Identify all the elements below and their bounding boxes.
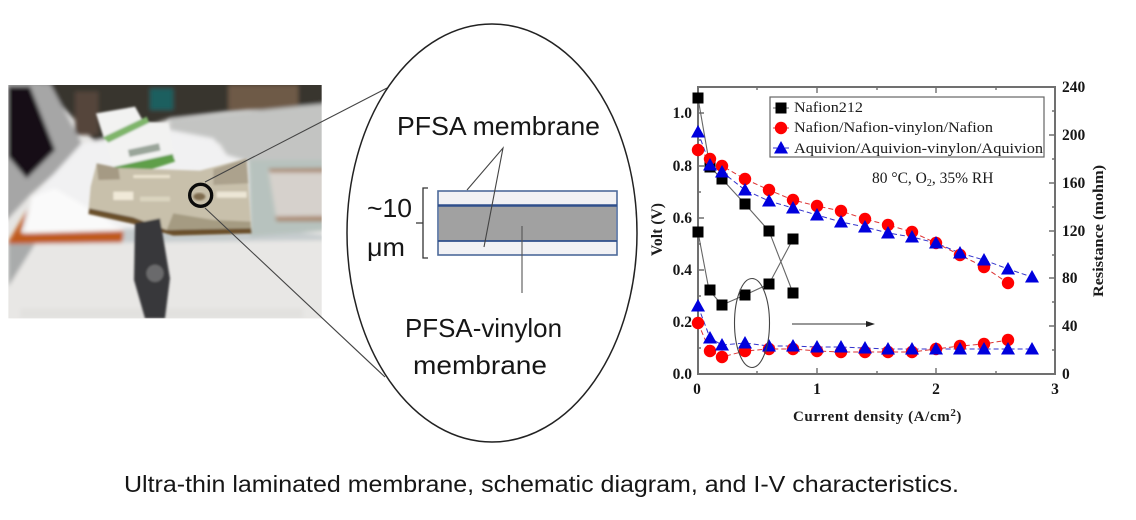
markers: Nafion212 [692,92,798,310]
I-V and resistance chart [649,79,1107,425]
markers: Aquivion/Aquivion-vinylon/Aquivion [691,125,1039,354]
legend: Nafion212 [794,100,863,116]
layered membrane schematic [438,191,617,255]
photo: laminated membrane held by tweezers [0,80,333,320]
series: Nafion212 voltage and resistance lines [698,98,793,305]
thickness bracket [416,188,428,258]
right axis title: Resistance (mohm) [1091,165,1107,297]
legend [770,97,1044,157]
test conditions annotation: 2 [927,178,932,189]
label: PFSA-vinylon: PFSA-vinylon [405,313,562,343]
left axis tick labels [673,105,692,383]
markers: Nafion/Nafion-vinylon/Nafion [692,144,1014,363]
legend: Nafion/Nafion-vinylon/Nafion [794,120,994,136]
left axis tick labels: 0.6 [673,210,692,227]
leader line for PFSA-vinylon membrane [521,226,523,293]
bottom axis title: ) [956,409,962,425]
bottom axis title: 2 [950,407,956,419]
right axis tick labels: 0 [1062,366,1070,383]
bottom axis title: Current density (A/cm [793,409,950,425]
magnified ellipse [347,24,637,442]
oval grouping resistance curves [734,278,770,368]
right axis tick labels: 240 [1062,79,1086,96]
test conditions annotation: 80 °C, O [872,170,927,187]
leader lines for PFSA membrane [467,148,503,247]
left axis tick labels: 0.8 [673,158,692,175]
callout lines from ring to magnified ellipse [205,88,387,377]
series: Nafion/Nafion-vinylon/Nafion lines [698,150,1008,357]
label: PFSA membrane: PFSA membrane [397,111,600,141]
bottom axis tick labels: 3 [1051,381,1059,398]
series: Aquivion/Aquivion-vinylon/Aquivion lines [698,132,1032,349]
label: membrane: membrane [413,350,547,380]
right axis tick labels: 80 [1062,270,1078,287]
bottom axis tick labels: 0 [693,381,701,398]
test conditions annotation: , 35% RH [932,170,993,187]
bottom axis tick labels: 1 [813,381,821,398]
bottom axis tick labels [693,381,1059,398]
bottom axis tick labels: 2 [932,381,940,398]
left axis title: Volt (V) [649,203,666,256]
right axis tick labels: 120 [1062,223,1086,240]
left axis tick labels: 0.0 [673,366,692,383]
right axis tick labels: 40 [1062,318,1078,335]
chart axes and ticks [698,87,1055,374]
right axis tick labels: 160 [1062,175,1086,192]
icon: black ring marking magnified area [190,184,212,206]
caption: Ultra-thin laminated membrane, schematic diagram, and I-V characteristics. [124,471,959,497]
left axis tick labels: 0.2 [673,314,692,331]
left axis tick labels: 0.4 [673,262,692,279]
right axis tick labels [1062,79,1086,383]
left axis tick labels: 1.0 [673,105,692,122]
label: thickness value: ~10 [367,193,412,223]
arrow pointing to right axis [792,321,875,327]
right axis tick labels: 200 [1062,127,1086,144]
legend: Aquivion/Aquivion-vinylon/Aquivion [794,141,1044,157]
label: thickness unit: μm [367,232,405,262]
